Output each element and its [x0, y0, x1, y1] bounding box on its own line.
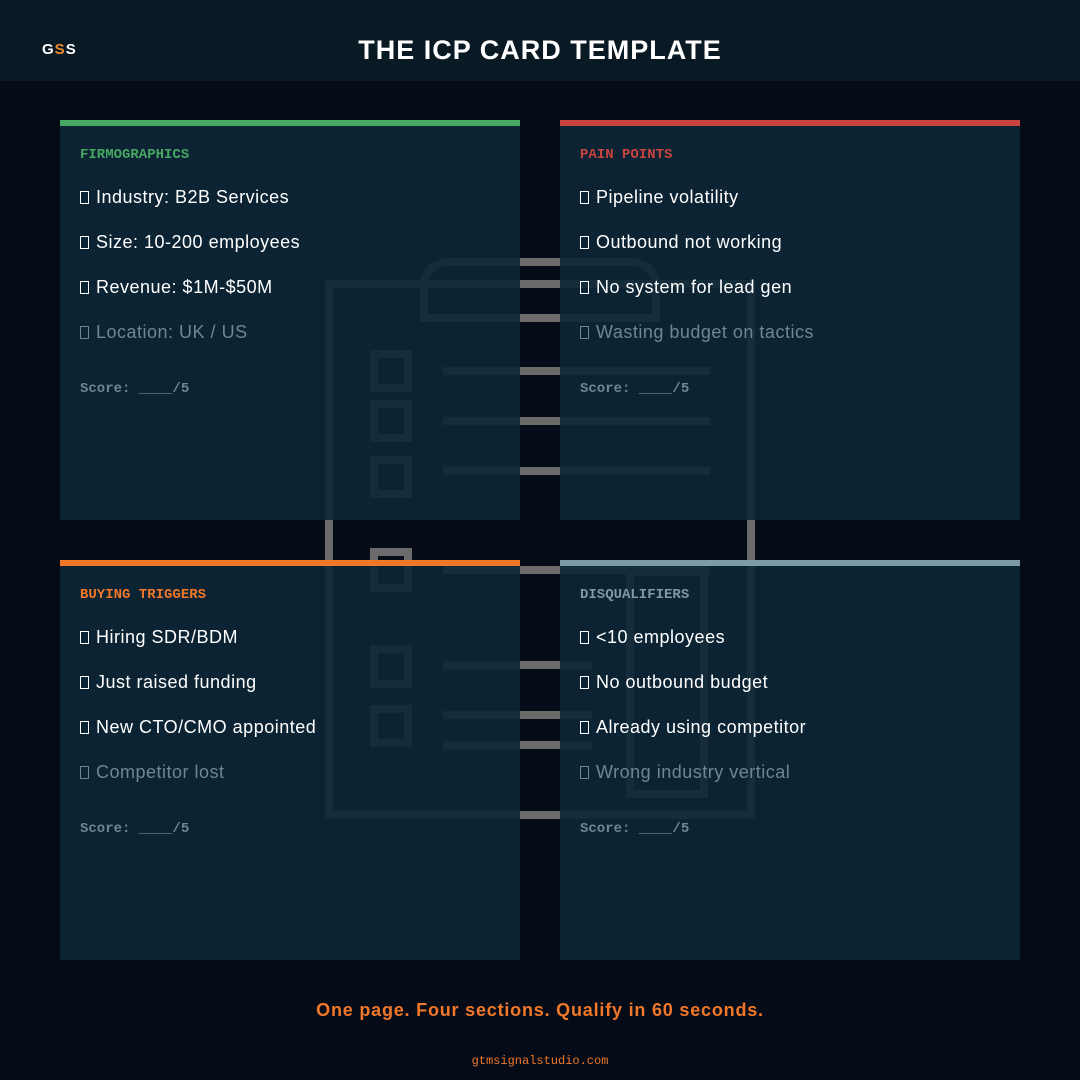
panel: pain points: PAIN POINTS — [580, 147, 672, 163]
panel: buying triggers: Just raised funding — [96, 672, 257, 692]
footer url: gtmsignalstudio.com — [472, 1054, 608, 1068]
panel: buying triggers: New CTO/CMO appointed — [96, 717, 316, 737]
panel: disqualifiers: Score: ____/5 — [580, 821, 689, 837]
panel: pain points: Score: ____/5 — [580, 381, 689, 397]
title: THE ICP CARD TEMPLATE — [358, 35, 722, 65]
panel: buying triggers: Score: ____/5 — [80, 821, 189, 837]
panel: pain points: Outbound not working — [596, 232, 782, 252]
panel: firmographics: Location: UK / US — [96, 322, 248, 342]
header bar — [0, 0, 1080, 81]
panel: buying triggers: BUYING TRIGGERS — [80, 587, 206, 603]
panel: pain points: Pipeline volatility — [596, 187, 739, 207]
panel: buying triggers: Competitor lost — [96, 762, 225, 782]
panel: pain points: No system for lead gen — [596, 277, 792, 297]
panel: disqualifiers: No outbound budget — [596, 672, 768, 692]
panel: pain points — [560, 120, 1020, 520]
panel: firmographics: Industry: B2B Services — [96, 187, 289, 207]
panel: disqualifiers — [560, 560, 1020, 960]
panel: buying triggers — [60, 560, 520, 960]
panel: disqualifiers: Already using competitor — [596, 717, 806, 737]
panel: firmographics: Revenue: $1M-$50M — [96, 277, 273, 297]
panel: firmographics: Size: 10-200 employees — [96, 232, 300, 252]
panel: buying triggers: Hiring SDR/BDM — [96, 627, 238, 647]
panel: firmographics — [60, 120, 520, 520]
panel: disqualifiers: Wrong industry vertical — [596, 762, 790, 782]
panel: disqualifiers: <10 employees — [596, 627, 725, 647]
panel: disqualifiers: DISQUALIFIERS — [580, 587, 689, 603]
panel: firmographics: FIRMOGRAPHICS — [80, 147, 189, 163]
tagline: One page. Four sections. Qualify in 60 seconds. — [316, 1000, 764, 1020]
panel: firmographics: Score: ____/5 — [80, 381, 189, 397]
panel: pain points: Wasting budget on tactics — [596, 322, 814, 342]
logo: GSS — [42, 41, 77, 58]
